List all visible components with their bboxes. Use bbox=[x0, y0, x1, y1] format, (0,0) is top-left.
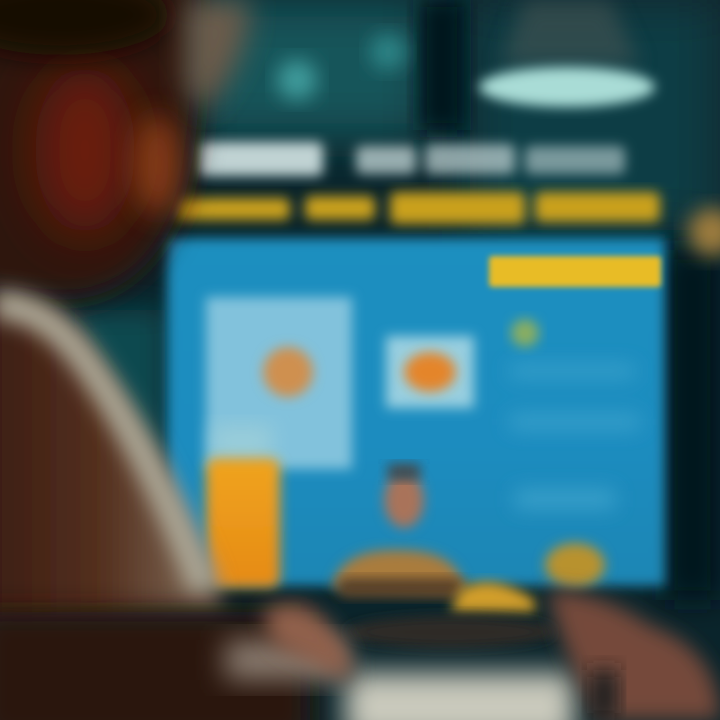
pendant lamp bbox=[479, 0, 655, 107]
small card with orange icon bbox=[386, 336, 474, 408]
blurred heading: white line bbox=[198, 142, 625, 176]
blurred heading: yellow band bbox=[175, 192, 660, 224]
left hand bbox=[262, 604, 350, 680]
pale card with orange icon bbox=[206, 297, 352, 469]
person: sweater bbox=[0, 295, 225, 620]
blurred text lines bbox=[510, 365, 640, 508]
right hand holding burger bbox=[545, 543, 720, 720]
blue screen panel bbox=[167, 238, 665, 586]
small yellow circle icon bbox=[511, 319, 539, 347]
person: head and hair bbox=[0, 0, 250, 300]
yellow label box bbox=[489, 256, 661, 287]
figure on screen bbox=[384, 464, 424, 528]
burger and plate bbox=[332, 550, 555, 648]
foreground dark table bbox=[0, 612, 575, 720]
right edge object bbox=[688, 208, 720, 256]
glass of orange juice bbox=[206, 425, 280, 588]
